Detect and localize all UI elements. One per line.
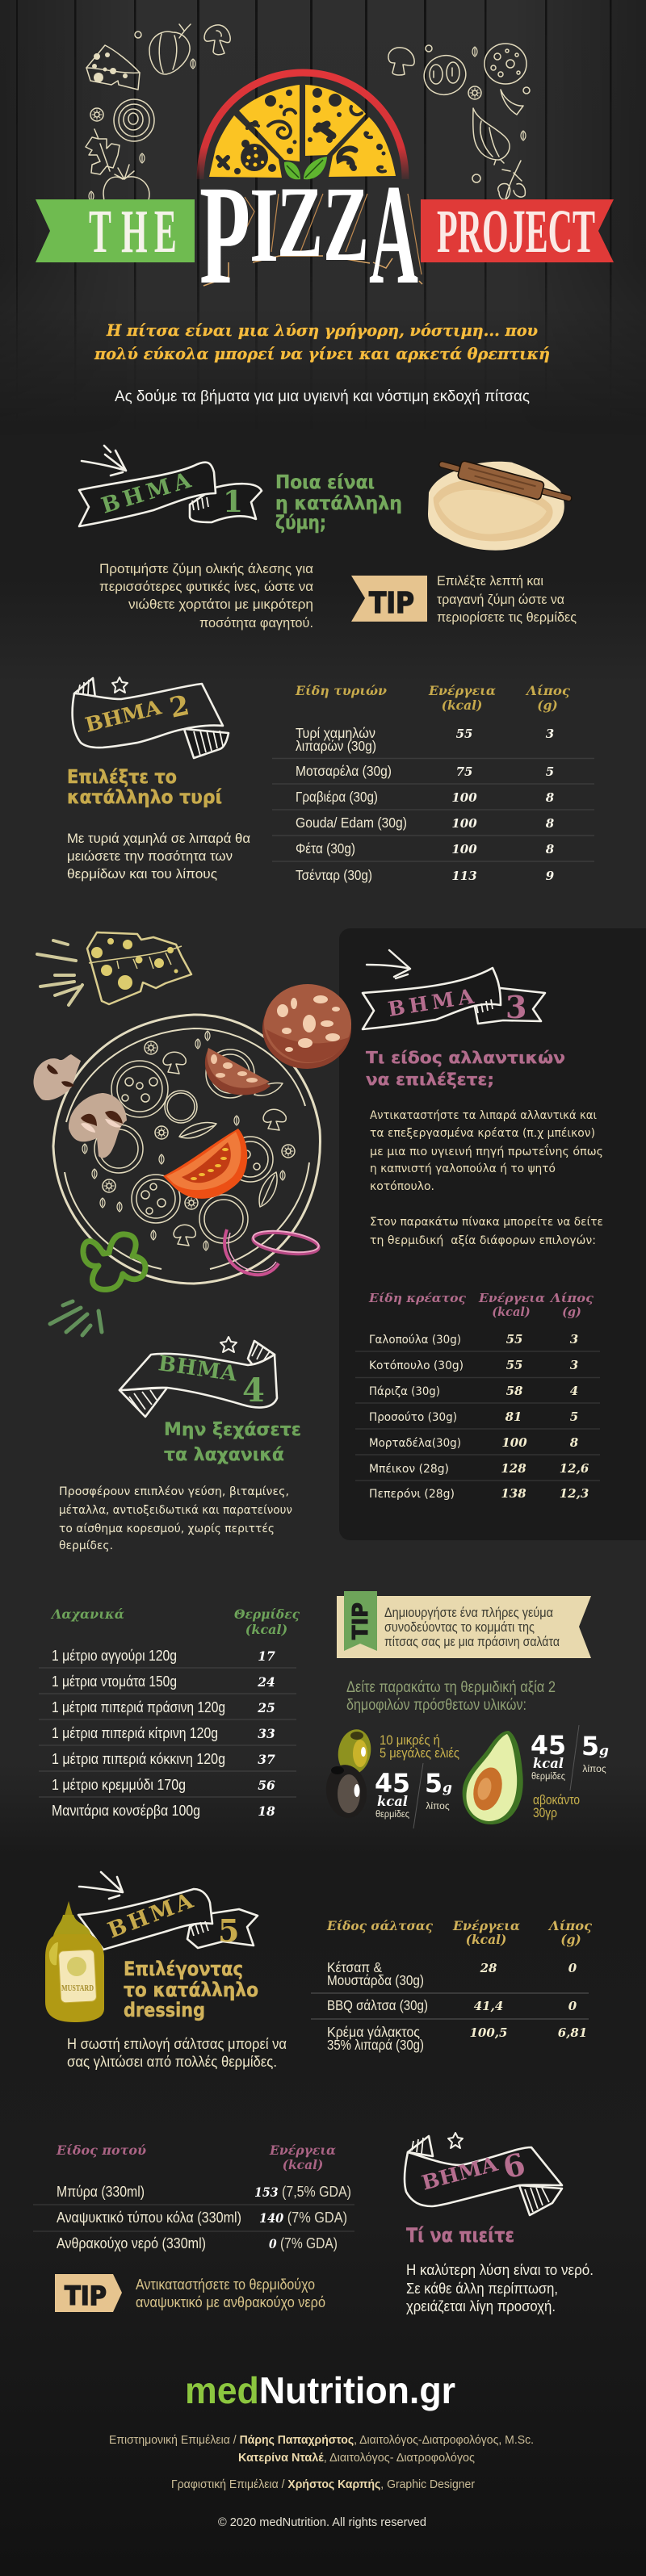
table header [326, 1918, 593, 1947]
table rows: Ανθρακούχο νερό (330ml) [57, 2235, 206, 2251]
stat: avocado fat: g [599, 1743, 609, 1759]
text: step 5 [67, 2036, 287, 2070]
tip: step 1: TIP [369, 587, 414, 620]
text: step 1: Προτιμήστε ζύμη ολικής άλεσης για [99, 561, 313, 576]
doodles: right food line art [388, 44, 530, 199]
icon: olive branch doodle [498, 161, 525, 199]
table: cheese: 8 [546, 842, 555, 857]
step 4 [39, 1337, 609, 1828]
table: vegetables: 24 [257, 1674, 275, 1690]
table header [56, 2142, 336, 2172]
icon: star [112, 677, 128, 693]
text: step 4 [59, 1485, 292, 1552]
footer [109, 2369, 534, 2529]
table: cheese: 113 [451, 869, 477, 883]
tip text: step 6: Αντικαταστήσετε το θερμιδούχο [136, 2277, 315, 2293]
heading: step 3: Τι είδος αλλαντικών [366, 1048, 565, 1067]
table: cheese [272, 683, 594, 883]
banner: red PROJECT ribbon [421, 198, 614, 266]
table header: Είδος σάλτσας [326, 1918, 434, 1933]
table header: (kcal) [466, 1932, 506, 1947]
label: 2: 2 [167, 689, 192, 725]
label: 4: 4 [242, 1372, 265, 1409]
icon: small mushroom [33, 1054, 81, 1100]
heading: step 2 [67, 767, 222, 808]
text: step 1: περισσότερες φυτικές ίνες, ώστε να [99, 579, 313, 594]
copyright: © 2020 medNutrition. All rights reserved [218, 2515, 426, 2529]
table: meats: 81 [505, 1409, 522, 1424]
header: wood planks [0, 0, 646, 352]
heading: step 4 [164, 1420, 301, 1465]
table: meats: 55 [506, 1332, 522, 1347]
stat: olive kcal: θερμίδες [375, 1808, 409, 1820]
icon: star [220, 1337, 237, 1352]
tip text: step 1: Επιλέξτε λεπτή και [437, 573, 543, 589]
table rows: 1 μέτρια πιπεριά πράσινη 120g [52, 1699, 225, 1715]
title: PIZZA: I [250, 165, 279, 284]
spiral and mushroom marks [218, 107, 385, 172]
table header [368, 1292, 594, 1319]
tip text: step 6 [136, 2277, 325, 2310]
table rows: Πεπερόνι (28g) [369, 1488, 455, 1501]
basil leaves [284, 157, 327, 179]
title: PIZZA: P [199, 157, 250, 314]
icon: black olive [323, 1762, 370, 1820]
heading: step 6: Τί να πιείτε [406, 2224, 514, 2247]
label: olive portion [380, 1733, 459, 1761]
tip text: step 6: αναψυκτικό με ανθρακούχο νερό [136, 2294, 325, 2310]
panel: step 3 background [339, 928, 646, 1540]
heading: step 4: τα λαχανικά [164, 1445, 284, 1465]
stat: avocado fat [581, 1731, 609, 1774]
icon: tomato doodle [103, 165, 149, 202]
text: step 2: μειώσετε την ποσότητα των [67, 848, 233, 864]
table rows: 1 μέτριο αγγούρι 120g [52, 1648, 177, 1664]
table rows: Κέτσαπ & [327, 1959, 382, 1975]
tip text: step 1: τραγανή ζύμη ώστε να [437, 592, 564, 607]
text: step 1: νιώθετε χορτάτοι με μικρότερη [128, 597, 313, 612]
text: step 6: Η καλύτερη λύση είναι το νερό. [406, 2261, 594, 2278]
icon: mustard bottle [45, 1901, 104, 2022]
table rows [57, 2184, 241, 2251]
table: meats: 55 [506, 1358, 522, 1372]
table rows: Gouda/ Edam (30g) [296, 815, 407, 831]
stat: olive fat: g [443, 1780, 452, 1796]
table rows: Μουστάρδα (30g) [327, 1972, 424, 1988]
table header: Ενέργεια [269, 2142, 336, 2158]
table rows: BBQ σάλτσα (30g) [327, 1997, 428, 2013]
heading: step 1: Ποια είναι [275, 472, 375, 493]
table: sauces: 0 [568, 1961, 577, 1975]
heading: step 1 [275, 472, 402, 534]
table rows [296, 725, 407, 883]
stat: olive kcal [375, 1768, 410, 1820]
icon: mushroom doodle [204, 25, 230, 55]
text: step 3: τα επεξεργασμένα κρέατα (π.χ μπέικον) [370, 1127, 595, 1140]
title: PIZZA: Z [277, 166, 323, 279]
heading: step 5: Επιλέγοντας [124, 1958, 243, 1980]
stat: avocado kcal: kcal [533, 1756, 564, 1772]
salami silhouette [241, 144, 268, 171]
table header: (g) [562, 1305, 581, 1319]
text: extras intro [346, 1679, 556, 1714]
table rows: Γραβιέρα (30g) [296, 789, 378, 805]
banner: green THE ribbon [36, 198, 195, 266]
ribbon: step 6 [405, 2133, 562, 2215]
label: ΒΗΜΑ: ΒΗΜΑ [419, 2152, 501, 2195]
chalk strokes: green [50, 1301, 102, 1335]
table: cheese: 3 [546, 727, 554, 741]
table: sauces [311, 1918, 593, 2053]
heading: step 5 [124, 1958, 258, 2021]
table: cheese: 9 [546, 869, 555, 883]
title: PIZZA: A [369, 154, 418, 314]
table rows: Μπέικον (28g) [369, 1463, 449, 1476]
table: cheese: 100 [451, 790, 477, 805]
label: ΒΗΜΑ: ΒΗΜΑ [104, 1888, 197, 1944]
credits [109, 2434, 534, 2491]
table header: (g) [537, 697, 558, 713]
logo: medNutrition.gr: medNutrition.gr [185, 2369, 455, 2411]
table: meats: 4 [570, 1384, 578, 1398]
text: step 3: Αντικαταστήστε τα λιπαρά αλλαντικά και [370, 1109, 597, 1122]
text: step 6: χρειάζεται λίγη προσοχή. [406, 2297, 556, 2314]
heading: step 5: το κατάλληλο [124, 1979, 258, 2001]
red crust arc [200, 73, 405, 179]
table header: Θερμίδες [234, 1606, 300, 1622]
table header: Είδη τυριών [295, 683, 387, 698]
stat: avocado kcal: 45 [531, 1730, 566, 1761]
icon: salami doodle [484, 44, 526, 84]
table rows: 35% λιπαρά (30g) [327, 2037, 424, 2053]
table: drinks: 140 (7% GDA) [259, 2209, 347, 2226]
icon: cheese doodle [86, 45, 140, 90]
heading: step 3 [366, 1048, 565, 1089]
ribbon: step 3 [363, 968, 545, 1029]
table: sauces: 0 [568, 1999, 577, 2013]
icon: onion rings [224, 1227, 320, 1275]
icon: green olive [334, 1727, 375, 1777]
table rows: Μπύρα (330ml) [57, 2184, 145, 2200]
table header: (kcal) [442, 697, 482, 713]
step 5 [45, 1872, 593, 2070]
text: step 3: κοτόπουλο. [370, 1180, 434, 1193]
table rows: λιπαρών (30g) [296, 738, 376, 754]
text: step 3: τη θερμιδική αξία διάφορων επιλογών: [370, 1234, 596, 1247]
table: cheese: 8 [546, 790, 555, 805]
label: 3: 3 [505, 989, 526, 1025]
tagline [94, 320, 550, 363]
ribbon: step 4 [120, 1337, 277, 1417]
label: ΒΗΜΑ: ΒΗΜΑ [99, 467, 195, 519]
text: step 6 [406, 2261, 594, 2314]
tip: salad ribbon [337, 1591, 591, 1658]
ribbon: step 2 [73, 677, 229, 758]
table: cheese: 55 [456, 727, 472, 741]
label: 6: 6 [499, 2146, 529, 2186]
table: sauces: 100,5 [470, 2025, 507, 2040]
step 6 [33, 2133, 594, 2314]
icon: pepper doodle [149, 24, 191, 74]
table rows: Πάριζα (30g) [369, 1385, 440, 1398]
table: vegetables: 25 [257, 1700, 275, 1715]
illustration: pizza with toppings [33, 932, 351, 1335]
table: meats: 5 [570, 1409, 578, 1424]
heading: step 2: Επιλέξτε το [67, 767, 177, 788]
icon: onion doodle [473, 108, 510, 165]
ribbon: step 1 [79, 463, 262, 526]
table: vegetables: 37 [258, 1752, 275, 1767]
text: step 2 [67, 831, 250, 882]
label: ΒΗΜΑ: ΒΗΜΑ [386, 984, 476, 1021]
credits: Κατερίνα Νταλέ, Διαιτολόγος- Διατροφολόγος [238, 2452, 475, 2465]
table: meats: 8 [570, 1435, 579, 1450]
title: PIZZA: Z [323, 164, 369, 283]
table: meats: 12,6 [560, 1461, 589, 1476]
table: meats: 100 [501, 1435, 527, 1450]
label: avocado portion: αβοκάντο [533, 1792, 580, 1807]
table rows: Αναψυκτικό τύπου κόλα (330ml) [57, 2209, 241, 2226]
icon: tomato slice doodle [418, 50, 472, 100]
nutrition: avocado [463, 1725, 609, 1824]
stat: avocado fat: λίπος [582, 1763, 606, 1774]
table rows: Τυρί χαμηλών [296, 725, 375, 741]
table: vegetables: 18 [258, 1803, 275, 1819]
text: step 6: Σε κάθε άλλη περίπτωση, [406, 2280, 558, 2297]
text: extras intro: δημοφιλών πρόσθετων υλικών: [346, 1697, 526, 1714]
logo: pizza half [200, 73, 405, 179]
pizza toppings [234, 88, 386, 174]
table header: (kcal) [492, 1305, 531, 1319]
stat: olive fat: 5 [425, 1768, 443, 1799]
label: avocado portion: 30γρ [533, 1805, 557, 1820]
text: step 3 [370, 1109, 603, 1247]
word: THE: THE [89, 198, 177, 266]
icon: avocado half [463, 1731, 523, 1824]
icon: garlic clove doodle [501, 90, 523, 115]
table: meats: 58 [506, 1384, 523, 1398]
table rows: Κρέμα γάλακτος [327, 2024, 420, 2040]
stat: avocado fat: 5 [581, 1731, 599, 1761]
table rows [52, 1648, 225, 1819]
table header: Είδος ποτού [56, 2142, 146, 2158]
table header: Λαχανικά [50, 1606, 124, 1622]
table: sauces: 41,4 [474, 1999, 503, 2013]
label: ΒΗΜΑ: ΒΗΜΑ [82, 695, 164, 737]
text: step 3: η καπνιστή γαλοπούλα ή το ψητό [370, 1162, 556, 1175]
stat: olive kcal: 45 [375, 1768, 410, 1799]
table: cheese: 5 [546, 764, 554, 779]
illustration: dough and rolling pin [428, 455, 574, 551]
tip: step 1 [351, 576, 427, 622]
table: meats: 128 [501, 1461, 526, 1476]
table: cheese: 100 [451, 842, 477, 857]
label: ΒΗΜΑ: ΒΗΜΑ [157, 1351, 239, 1387]
tagline: Η πίτσα είναι μια λύση γρήγορη, νόστιμη... που [106, 320, 538, 340]
tip: step 6 [55, 2274, 122, 2312]
arrow [79, 1872, 123, 1899]
tip: salad ribbon: πίτσας σας με μια πράσινη σαλάτα [384, 1635, 560, 1649]
table: vegetables: 33 [258, 1726, 275, 1741]
stat: olive fat: λίπος [426, 1800, 450, 1812]
table header: Είδη κρέατος [368, 1292, 466, 1305]
icon: star [448, 2133, 463, 2148]
table rows: 1 μέτρια πιπεριά κίτρινη 120g [52, 1725, 218, 1741]
text: step 4: θερμίδες. [59, 1539, 113, 1552]
icon: mushroom doodle right [388, 48, 414, 75]
yellow slices [209, 85, 396, 178]
doodles: left food line art [86, 24, 230, 202]
table header [50, 1606, 300, 1637]
title: PIZZA [199, 154, 422, 314]
table: meats: 3 [570, 1332, 578, 1347]
heading: step 2: κατάλληλο τυρί [67, 787, 222, 808]
table rows: 1 μέτρια πιπεριά κόκκινη 120g [52, 1751, 225, 1767]
table: vegetables: 17 [258, 1648, 275, 1664]
text: step 5: σας γλιτώσει από πολλές θερμίδες. [67, 2054, 277, 2070]
table rows: 1 μέτρια ντομάτα 150g [52, 1673, 177, 1690]
table header: Λίπος [547, 1918, 593, 1933]
tip text: step 1: περιορίσετε τις θερμίδες [437, 609, 577, 625]
table: meats: 138 [501, 1486, 526, 1501]
arrow [82, 446, 126, 475]
table: meats: 3 [570, 1358, 578, 1372]
table: drinks: 0 (7% GDA) [269, 2235, 338, 2251]
table: vegetables: 56 [258, 1778, 275, 1793]
text: extras intro: Δείτε παρακάτω τη θερμιδική αξία 2 [346, 1679, 556, 1696]
table: meats [355, 1292, 600, 1501]
tip: step 6: TIP [65, 2281, 107, 2311]
chalk strokes: cream [37, 940, 82, 1005]
arrow [367, 950, 410, 978]
tip text: step 1 [437, 573, 577, 625]
tip: salad ribbon: συνοδεύοντας το κομμάτι της [384, 1620, 535, 1635]
icon: onion slice doodle [114, 99, 154, 141]
table header: (kcal) [245, 1622, 287, 1637]
heading: step 3: να επιλέξετε; [366, 1070, 494, 1089]
table rows: 1 μέτριο κρεμμύδι 170g [52, 1777, 186, 1793]
label: olive portion: 5 μεγάλες ελιές [380, 1746, 459, 1761]
label: 5: 5 [218, 1912, 239, 1949]
table rows: Μορταδέλα(30g) [369, 1437, 461, 1450]
table header: (g) [560, 1932, 581, 1947]
heading: step 1: η κατάλληλη [275, 493, 402, 514]
table header: Ενέργεια [478, 1292, 545, 1305]
table header: (kcal) [283, 2157, 323, 2172]
step 1 [79, 446, 577, 630]
text: step 3: Στον παρακάτω πίνακα μπορείτε να δείτε [370, 1216, 603, 1229]
icon: tomato slice [163, 1129, 247, 1199]
table: drinks: 153 (7,5% GDA) [254, 2184, 351, 2200]
table rows: Προσούτο (30g) [369, 1411, 457, 1424]
table rows: Μανιτάρια κονσέρβα 100g [52, 1803, 200, 1819]
label: avocado portion [533, 1792, 580, 1820]
credits: Επιστημονική Επιμέλεια / Πάρης Παπαχρήστος, Διαιτολόγος-Διατροφολόγος, M.Sc. [109, 2434, 534, 2447]
icon: large mushroom [69, 1093, 127, 1158]
table: cheese: 8 [546, 816, 555, 831]
table rows: Κοτόπουλο (30g) [369, 1359, 464, 1372]
heading: step 1: ζύμη; [275, 513, 326, 534]
table header: Λίπος [549, 1292, 594, 1305]
text: step 5: Η σωστή επιλογή σάλτσας μπορεί να [67, 2036, 287, 2052]
table header: Λίπος [525, 683, 571, 698]
table rows: Μοτσαρέλα (30g) [296, 763, 392, 779]
step 3 [355, 950, 603, 1501]
text: step 2: θερμίδων και του λίπους [67, 866, 217, 882]
table: drinks [33, 2142, 354, 2251]
step 2 [67, 677, 594, 883]
table: vegetables [39, 1606, 300, 1819]
stat: olive kcal: kcal [377, 1794, 409, 1810]
table: sauces: 6,81 [558, 2025, 587, 2040]
text: step 4: το αίσθημα κορεσμού, χωρίς περιττές [59, 1523, 275, 1535]
table: meats: 12,3 [560, 1486, 589, 1501]
pizza outline [53, 1015, 320, 1284]
intro line: Ας δούμε τα βήματα για μια υγιεινή και νόστιμη εκδοχή πίτσας [115, 388, 530, 405]
ribbon: step 5 [78, 1888, 258, 1950]
icon: green pepper ring [83, 1234, 145, 1289]
text: step 1: ποσότητα φαγητού. [199, 615, 313, 630]
credits: Γραφιστική Επιμέλεια / Χρήστος Καρπής, Graphic Designer [171, 2478, 475, 2491]
table rows: Γαλοπούλα (30g) [369, 1334, 461, 1347]
table: cheese: 100 [451, 816, 477, 831]
stat: avocado kcal [531, 1730, 566, 1782]
tip: salad ribbon: TIP [349, 1602, 373, 1640]
table: sauces: 28 [480, 1961, 497, 1975]
text: step 3: με μια πιο υγιεινή πηγή πρωτεΐνης όπως [370, 1144, 603, 1158]
table rows: Τσένταρ (30g) [296, 867, 372, 883]
text: step 2: Με τυριά χαμηλά σε λιπαρά θα [67, 831, 250, 846]
table rows [327, 1959, 428, 2053]
table header: Ενέργεια [428, 683, 496, 698]
table rows [369, 1334, 464, 1501]
heading: step 5: dressing [124, 1999, 205, 2021]
tip: salad ribbon: Δημιουργήστε ένα πλήρες γεύμα [384, 1606, 553, 1620]
icon: salami half [205, 1048, 271, 1095]
text: step 1 [99, 561, 313, 630]
text: step 4: μέταλλα, αντιοξειδωτικά και παρατείνουν [59, 1504, 292, 1517]
label: 1: 1 [223, 485, 243, 519]
icon: parsley doodle [86, 129, 120, 174]
icon: salami slice [262, 984, 351, 1069]
text: step 4: Προσφέρουν επιπλέον γεύση, βιταμίνες, [59, 1485, 289, 1498]
table: cheese: 75 [456, 764, 472, 779]
tagline: πολύ εύκολα μπορεί να γίνει και αρκετά θρεπτική [94, 344, 550, 363]
icon: mustard bottle: MUSTARD [61, 1983, 94, 1993]
table header [295, 683, 571, 713]
stat: avocado kcal: θερμίδες [531, 1770, 565, 1782]
nutrition: olives [323, 1727, 459, 1828]
stat: olive fat [425, 1768, 452, 1812]
label: olive portion: 10 μικρές ή [380, 1733, 440, 1748]
heading: step 4: Μην ξεχάσετε [164, 1420, 301, 1440]
icon: cheese wedge [87, 932, 191, 1004]
table rows: Φέτα (30g) [296, 840, 355, 857]
table header: Ενέργεια [452, 1918, 520, 1933]
